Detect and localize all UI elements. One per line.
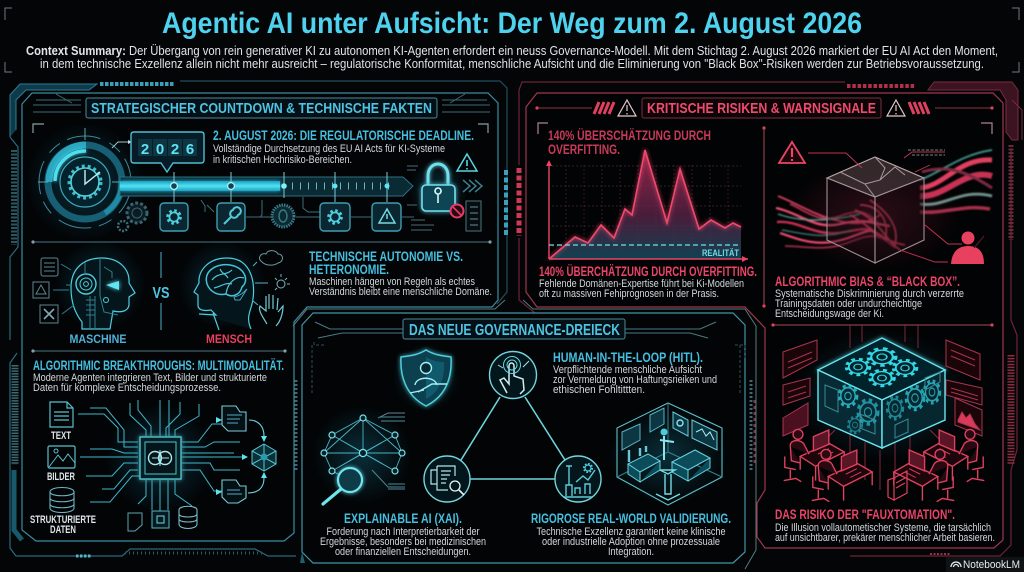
text: validierung bbox=[531, 511, 731, 558]
output documents bbox=[222, 406, 246, 503]
text: technische autonomie: Maschinen hängen von Regeln als echtes bbox=[309, 276, 475, 288]
panel heading bbox=[535, 98, 994, 134]
text: fauxtomation bbox=[775, 507, 995, 544]
label: maschine: MASCHINE bbox=[70, 332, 126, 346]
icon: countdown clock bbox=[25, 122, 147, 242]
text: hitl: HUMAN-IN-THE-LOOP (HITL). bbox=[553, 350, 703, 365]
icon: isometric lab bbox=[608, 403, 728, 505]
text: chart heading bbox=[548, 128, 711, 157]
text: validierung: Technische Exzellenz garantiert keine klinische bbox=[536, 526, 726, 538]
icon: fauxtomation cube bbox=[783, 325, 982, 490]
counter 2026: 6 bbox=[186, 141, 194, 158]
text: multimodalität: ALGORITHMIC BREAKTHROUGHS: MULTIMODALITÄT. bbox=[33, 358, 284, 373]
panel heading: KRITISCHE RISIKEN & WARNSIGNALE bbox=[647, 101, 876, 117]
text: fauxtomation: DAS RISIKO DER "FAUXTOMATION". bbox=[775, 507, 955, 522]
chart: overfitting: REALITÄT bbox=[702, 248, 739, 258]
text: overfitting: Fehlende Domänen-Expertise führt bei Ki-Modellen bbox=[539, 278, 744, 290]
counter 2026 bbox=[131, 132, 204, 172]
text: validierung: RIGOROSE REAL-WORLD VALIDIERUNG. bbox=[531, 511, 731, 526]
text: multimodalität bbox=[33, 358, 284, 394]
chip peripherals bbox=[128, 513, 142, 531]
text: chart heading: 140% ÜBERSCHÄTZUNG DURCH bbox=[548, 128, 711, 143]
icon: image: BILDER bbox=[47, 471, 75, 483]
cube edges bbox=[827, 157, 924, 197]
vs divider: VS bbox=[152, 285, 170, 302]
icon: image bbox=[47, 446, 75, 483]
text: technische autonomie bbox=[309, 249, 492, 298]
panel heading: STRATEGISCHER COUNTDOWN & TECHNISCHE FAKTEN bbox=[91, 101, 432, 117]
icon: shield bbox=[392, 344, 460, 412]
panel frame: left bbox=[10, 81, 507, 556]
panel heading bbox=[312, 319, 745, 395]
data flows bbox=[776, 150, 992, 250]
text: validierung: oder industrielle Adoption ohne prozessuale bbox=[542, 536, 720, 548]
text: hitl bbox=[553, 350, 717, 396]
text: validierung: Integration. bbox=[608, 546, 654, 558]
text: multimodalität: Moderne Agenten integrieren Text, Bilder und strukturierte bbox=[33, 372, 267, 384]
text: algorithmic bias: Entscheidungswage der Ki. bbox=[775, 308, 884, 320]
text: hitl: ethischen Fohltittten. bbox=[553, 384, 645, 396]
output network bbox=[252, 444, 276, 471]
counter 2026: 2 bbox=[171, 141, 179, 158]
panel: kritische risiken bbox=[519, 82, 1022, 556]
text: algorithmic bias: ALGORITHMIC BIAS & “BLACK BOX”. bbox=[775, 274, 960, 289]
text: regulatorische deadline bbox=[213, 128, 474, 166]
microchip bbox=[140, 437, 181, 479]
watermark: notebooklm: NotebookLM bbox=[963, 559, 1020, 571]
icon: black box cube bbox=[776, 150, 992, 270]
text: regulatorische deadline: 2. AUGUST 2026: DIE REGULATORISCHE DEADLINE. bbox=[213, 128, 474, 143]
icon: person bbox=[951, 232, 984, 264]
text: regulatorische deadline: Vollständige Durchsetzung des EU AI Acts für KI-Systeme bbox=[213, 143, 445, 155]
panel frame: governance bbox=[293, 300, 756, 569]
text: xai: Forderung nach Interpretierbarkeit der bbox=[326, 526, 480, 538]
counter 2026: 0 bbox=[156, 141, 164, 158]
timeline bar bbox=[120, 172, 413, 202]
cube faces bbox=[818, 338, 945, 400]
text: xai: oder finanziellen Entscheidungen. bbox=[335, 546, 471, 558]
vs divider bbox=[152, 252, 170, 330]
wires bbox=[820, 325, 945, 490]
text: algorithmic bias bbox=[775, 274, 964, 320]
text: technische autonomie: HETERONOMIE. bbox=[309, 262, 389, 277]
icon: database: STRUKTURIERTE bbox=[30, 514, 96, 526]
text: multimodalität: Daten für komplexe Entscheidungsprozesse. bbox=[33, 382, 221, 394]
text: hitl: Verpflichtende menschliche Aufsicht bbox=[553, 364, 702, 376]
triangle connector bbox=[461, 397, 565, 479]
context summary bbox=[26, 44, 998, 71]
text: xai: EXPLAINABLE AI (XAI). bbox=[344, 511, 462, 526]
icon: padlock with warning bbox=[407, 154, 482, 231]
side screens bbox=[783, 340, 982, 436]
diagram: multimodal inputs to chip bbox=[30, 400, 276, 536]
text: xai bbox=[320, 511, 486, 558]
timeline icons bbox=[160, 197, 414, 231]
panel heading: DAS NEUE GOVERNANCE-DREIECK bbox=[409, 322, 620, 339]
panel heading bbox=[33, 94, 490, 133]
label: mensch: MENSCH bbox=[206, 332, 252, 346]
text: algorithmic bias: Trainingsdaten oder undurcheichtige bbox=[775, 298, 922, 310]
watermark: notebooklm bbox=[946, 557, 1024, 572]
text: overfitting: 140% ÜBERCHÄTZUNG DURCH OVERFITTING. bbox=[539, 264, 757, 279]
text: technische autonomie: Verständnis bleibt eine menschliche Domäne. bbox=[309, 286, 492, 298]
text: chart heading: OVERFITTING. bbox=[548, 142, 620, 157]
counter 2026: 2 bbox=[141, 141, 149, 158]
icon: network with magnifier bbox=[312, 405, 412, 505]
icon: warning triangle bbox=[779, 142, 805, 163]
panel frame: right bbox=[519, 82, 1022, 556]
text: hitl: zor Vermeldung von Haftungsrieiken und bbox=[553, 374, 717, 386]
text: xai: Ergebnisse, besonders bei medizinischen bbox=[320, 536, 486, 548]
decorative page corners bbox=[5, 8, 1019, 72]
text: regulatorische deadline: in kritischen Hochrisiko-Bereichen. bbox=[213, 154, 352, 166]
icon: human workers bbox=[784, 429, 984, 502]
cube gears bbox=[839, 348, 940, 433]
icon: validation node bbox=[555, 456, 601, 502]
text: overfitting: oft zu massiven Fehiprognosen in der Prasis. bbox=[539, 288, 719, 300]
panel: strategischer countdown bbox=[10, 81, 507, 556]
icon: xai node bbox=[424, 456, 470, 502]
icon: text document: TEXT bbox=[51, 430, 71, 442]
text: technische autonomie: TECHNISCHE AUTONOMIE VS. bbox=[309, 249, 463, 264]
panel: governance dreieck bbox=[293, 300, 756, 569]
icon: text document bbox=[50, 402, 73, 442]
icon: hitl node bbox=[490, 352, 536, 398]
text: algorithmic bias: Systematische Diskriminierung durch verzerrte bbox=[775, 288, 964, 300]
title: Agentic AI unter Aufsicht: Der Weg zum 2. August 2026 bbox=[162, 7, 862, 40]
icon: human head bbox=[178, 241, 290, 330]
chart: overfitting bbox=[546, 150, 748, 262]
text: overfitting bbox=[539, 264, 757, 300]
icon: machine head bbox=[33, 239, 146, 331]
icon: database bbox=[30, 488, 96, 536]
circuit traces bbox=[78, 400, 246, 512]
icon: database: DATEN bbox=[50, 524, 76, 536]
